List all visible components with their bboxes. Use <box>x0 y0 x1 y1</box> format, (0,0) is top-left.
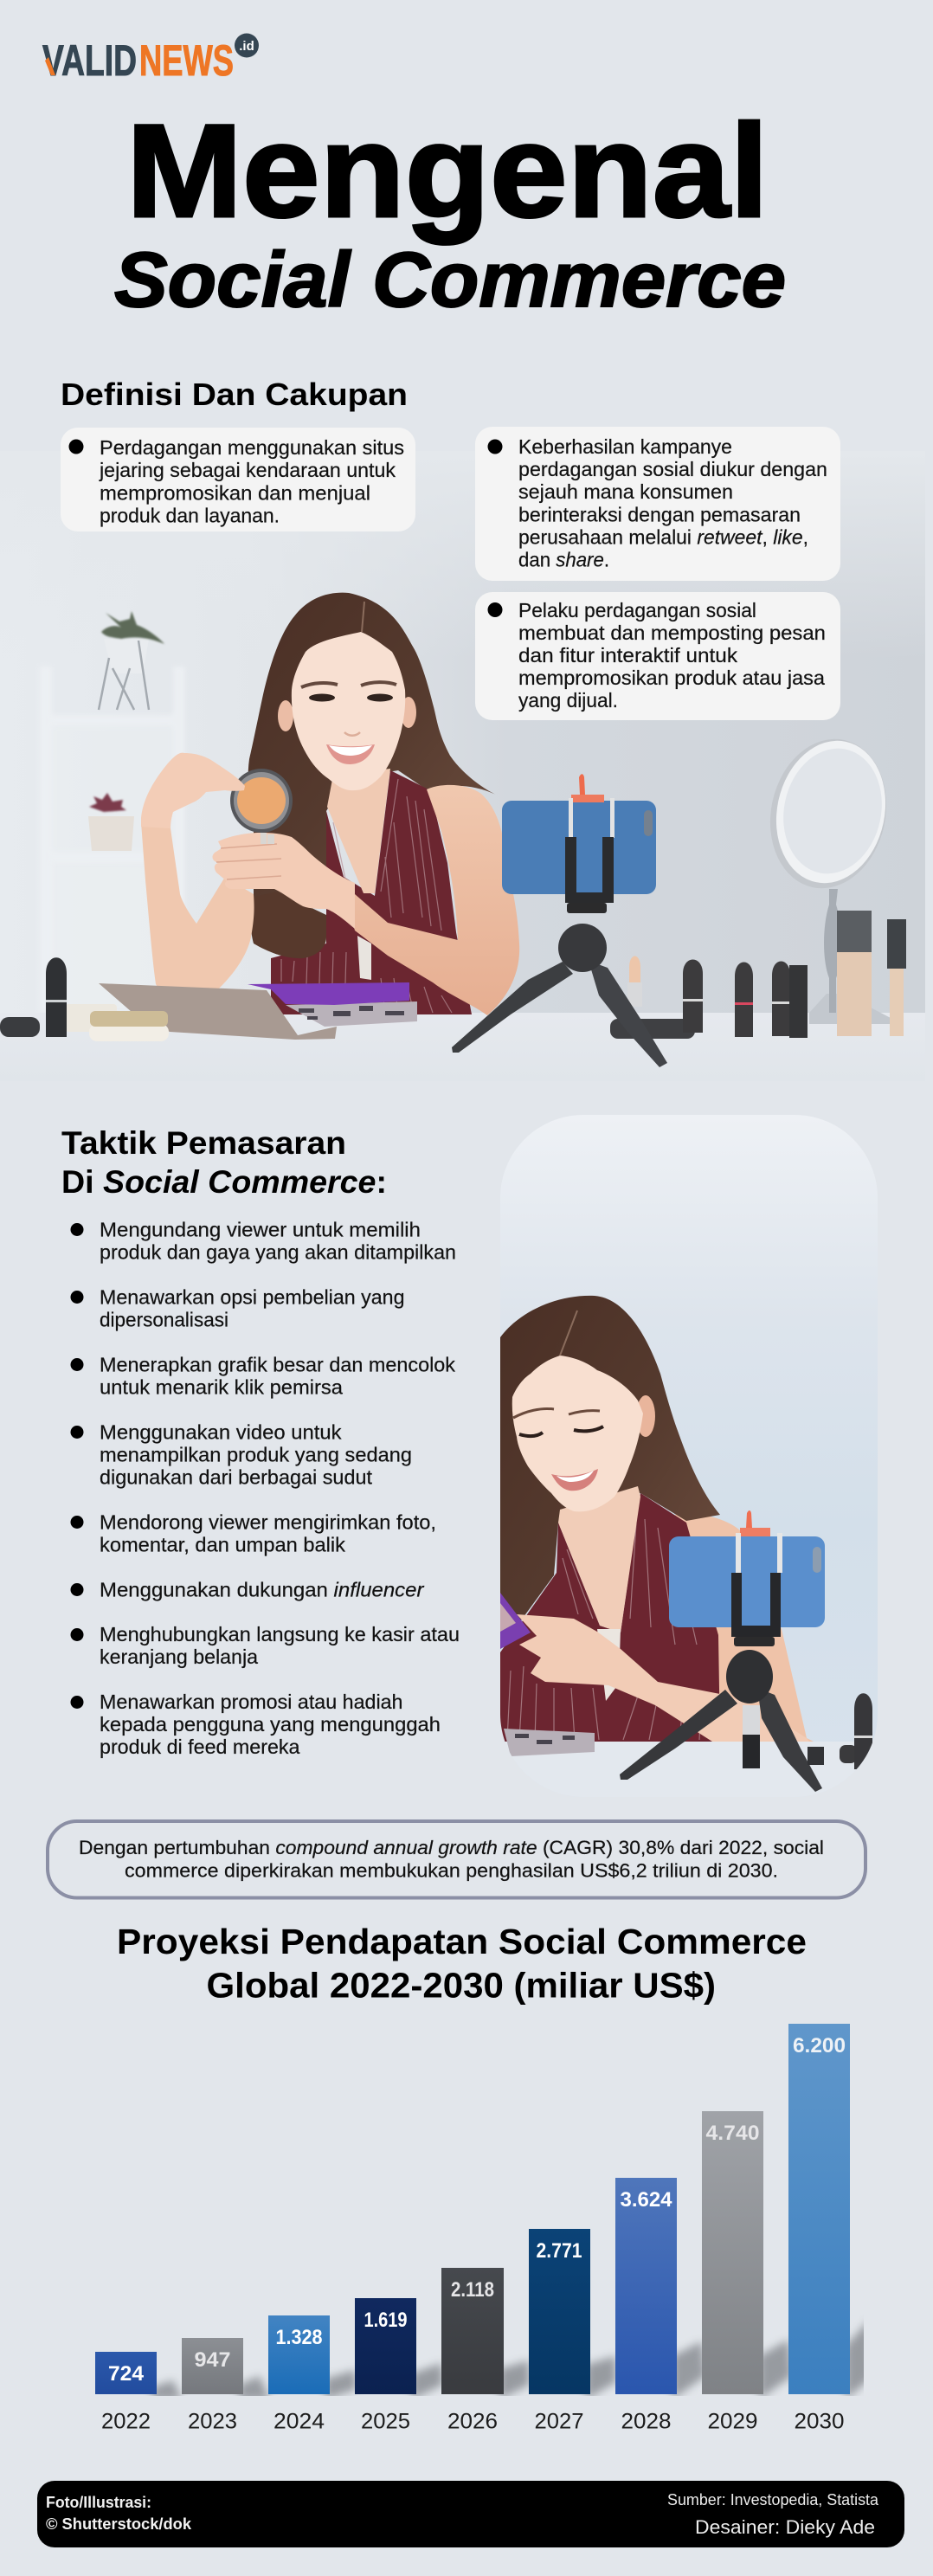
tactic 8: kepada pengguna yang mengunggah <box>100 1713 441 1736</box>
lying lipstick behind tripod <box>610 1019 695 1039</box>
tactic 4: digunakan dari berbagai sudut <box>100 1466 373 1489</box>
tripod ball <box>558 924 607 972</box>
card: definition 1 <box>61 428 415 531</box>
tactic 7: keranjang belanja <box>100 1645 258 1668</box>
tactic 2: Menawarkan opsi pembelian yang <box>100 1285 405 1308</box>
tactic 3: Menerapkan grafik besar dan mencolok <box>100 1353 455 1375</box>
tripod ball <box>726 1650 773 1703</box>
card text: perdagangan sosial diukur dengan <box>518 458 827 480</box>
chart title <box>117 1922 807 2005</box>
bar 2027: 2.771 <box>537 2239 582 2263</box>
tactic 2: dipersonalisasi <box>100 1309 228 1331</box>
finger lines <box>216 844 281 879</box>
clamp rods <box>736 1533 782 1573</box>
lips <box>326 744 375 764</box>
dress <box>500 1493 720 1742</box>
neck and chest <box>327 769 390 893</box>
dress stripes <box>281 779 452 1013</box>
hair back <box>248 593 496 900</box>
year axis labels: 2025 <box>361 2410 410 2434</box>
tripod right leg <box>589 961 667 1067</box>
card text: perusahaan melalui retweet, like, <box>518 526 808 549</box>
purple palette <box>248 982 409 1005</box>
lipstick 4 <box>772 961 790 1036</box>
tactic 1: produk dan gaya yang akan ditampilkan <box>100 1241 456 1264</box>
bullet <box>488 440 502 454</box>
logo wordmark NEWS: NEWS <box>139 36 234 85</box>
tactic 7 <box>71 1623 460 1668</box>
tactic 8: Menawarkan promosi atau hadiah <box>100 1690 403 1713</box>
hair part line <box>560 1311 577 1356</box>
year axis labels: 2027 <box>535 2410 583 2434</box>
lipstick 2 <box>683 959 703 1033</box>
small powder tin <box>65 1004 117 1032</box>
tactic 7: Menghubungkan langsung ke kasir atau <box>100 1623 460 1645</box>
year axis labels: 2030 <box>795 2410 845 2434</box>
leopard box <box>504 1729 595 1756</box>
card text <box>518 599 826 712</box>
chest <box>558 1486 640 1633</box>
clamp arms <box>731 1573 781 1637</box>
card text: produk dan layanan. <box>100 504 280 526</box>
nose <box>344 732 360 736</box>
card text: dan fitur interaktif untuk <box>518 644 738 667</box>
clamp knob <box>746 1510 752 1528</box>
tactic 8: produk di feed mereka <box>100 1736 300 1758</box>
clamp top <box>571 795 604 802</box>
clamp knob <box>579 774 585 795</box>
face <box>292 632 405 790</box>
year axis labels: 2026 <box>447 2410 498 2434</box>
callout text <box>79 1837 824 1882</box>
year axis labels: 2024 <box>273 2410 325 2434</box>
leopard box <box>286 1001 417 1027</box>
chart title: Proyeksi Pendapatan Social Commerce <box>117 1922 807 1961</box>
card background <box>475 427 840 581</box>
heading: taktik pemasaran <box>61 1125 387 1200</box>
bar 2024 <box>268 2315 330 2394</box>
photo backdrop <box>0 451 925 1081</box>
lipstick tall nude <box>627 956 642 1007</box>
mount <box>567 903 607 913</box>
card text: mempromosikan produk atau jasa <box>518 667 825 689</box>
mirror base <box>809 994 891 1024</box>
teeth <box>557 1471 594 1482</box>
bar 2026 <box>441 2268 504 2394</box>
mirror rim <box>763 731 898 893</box>
tactic 4: menampilkan produk yang sedang <box>100 1443 412 1465</box>
tactic 6: Menggunakan dukungan influencer <box>100 1578 425 1600</box>
clamp top <box>740 1528 770 1536</box>
title line 2: Social Commerce <box>114 237 786 324</box>
bar 2029: 4.740 <box>706 2122 760 2145</box>
card text: jejaring sebagai kendaraan untuk <box>99 459 396 481</box>
bar 2025 <box>355 2298 416 2394</box>
lipstick 3 <box>735 963 753 1037</box>
panel backdrop <box>500 1115 878 1797</box>
title line 1: Mengenal <box>126 97 769 245</box>
footer bar <box>37 2481 904 2547</box>
bar 2027 <box>529 2229 590 2394</box>
callout frame <box>48 1821 865 1897</box>
black tube <box>789 965 808 1038</box>
tactic 4 <box>71 1420 412 1489</box>
left arm <box>141 822 254 989</box>
inner white top <box>597 1629 621 1701</box>
year axis labels: 2023 <box>188 2410 237 2434</box>
card text: Pelaku perdagangan sosial <box>518 599 756 621</box>
bar 2028: 3.624 <box>620 2188 672 2212</box>
clamp rods <box>569 798 614 838</box>
card text <box>518 435 827 571</box>
tactic 3 <box>71 1353 455 1399</box>
bar chart: revenue projection <box>95 2024 874 2434</box>
eyes <box>519 1426 603 1436</box>
plant on shelf <box>99 611 164 710</box>
dress <box>271 770 472 1014</box>
bar 2022: 724 <box>108 2362 145 2386</box>
bar 2024: 1.328 <box>275 2326 322 2349</box>
bar 2025: 1.619 <box>364 2309 407 2332</box>
black box behind <box>808 1747 824 1765</box>
tactic 8 <box>71 1690 441 1758</box>
card background <box>475 592 840 720</box>
photo: beauty vlogger with phone on tripod <box>0 451 925 1081</box>
lying lipstick <box>840 1745 854 1763</box>
foundation bottle <box>837 911 872 1036</box>
purple palette <box>500 1593 531 1649</box>
upper arm and shoulder <box>675 1514 814 1742</box>
year axis labels: 2029 <box>708 2410 758 2434</box>
lower hand <box>212 833 355 929</box>
title <box>114 97 786 324</box>
card text: dan share. <box>518 549 609 571</box>
dress stripes <box>507 1519 701 1740</box>
eyebrows <box>513 1408 600 1418</box>
card text: berinteraksi dengan pemasaran <box>518 504 801 526</box>
tactic 1: Mengundang viewer untuk memilih <box>100 1219 421 1241</box>
standing lipstick left <box>46 957 67 1037</box>
logo badge text: .id <box>239 39 254 54</box>
tablet case <box>99 983 337 1040</box>
eyes <box>309 694 393 701</box>
source credit: Sumber: Investopedia, Statista <box>667 2491 879 2508</box>
card: definition 3 <box>475 592 840 720</box>
logo: Validnews.id <box>42 33 259 85</box>
bar 2026: 2.118 <box>451 2278 494 2302</box>
cushion compact <box>89 1011 169 1041</box>
logo accent <box>45 57 55 75</box>
compact base <box>229 853 271 880</box>
compact powder <box>230 769 293 833</box>
tripod left leg <box>452 962 573 1053</box>
year axis labels: 2022 <box>101 2410 151 2434</box>
chart title: Global 2022-2030 (miliar US$) <box>206 1965 716 2005</box>
tactic 2 <box>71 1285 405 1331</box>
lower hair lobe <box>250 892 326 958</box>
photo credit: © Shutterstock/dok <box>46 2515 192 2533</box>
hair part line <box>362 602 364 632</box>
bullet <box>488 602 502 617</box>
bar 2029 <box>702 2111 763 2394</box>
card text: sejauh mana konsumen <box>518 480 733 503</box>
logo wordmark VALID: VALID <box>42 36 137 85</box>
ear left <box>278 700 293 731</box>
mirror stem <box>824 889 841 1013</box>
bar shadows <box>152 2320 874 2399</box>
callout text: commerce diperkirakan membukukan penghasilan US$6,2 triliun di 2030. <box>125 1859 778 1882</box>
clamp arms <box>565 837 614 903</box>
mount <box>734 1637 775 1646</box>
bar 2028 <box>615 2178 677 2394</box>
mirror glass <box>772 739 893 883</box>
heading: taktik pemasaran: Taktik Pemasaran <box>61 1125 346 1161</box>
heading: definisi dan cakupan: Definisi Dan Cakupan <box>61 377 408 412</box>
white inner top <box>357 936 371 980</box>
ear <box>639 1395 655 1437</box>
table top <box>0 1013 925 1081</box>
tripod right leg <box>757 1688 822 1792</box>
upper hand <box>141 753 245 828</box>
card text: membuat dan memposting pesan <box>518 621 826 644</box>
photo credit <box>46 2494 192 2533</box>
photo: woman looking at palette, rounded panel <box>500 1115 878 1797</box>
list: marketing tactics <box>71 1219 460 1758</box>
card text: Perdagangan menggunakan situs <box>100 436 404 459</box>
callout: CAGR growth <box>48 1821 865 1897</box>
white shelf <box>40 667 185 1013</box>
card: definition 2 <box>475 427 840 581</box>
rings <box>261 833 274 844</box>
eyebrows <box>301 682 396 687</box>
bullet <box>69 440 83 454</box>
tactic 5: Mendorong viewer mengirimkan foto, <box>100 1510 436 1533</box>
footer background <box>37 2481 904 2547</box>
woman <box>141 593 519 1015</box>
bar 2023 <box>182 2338 243 2394</box>
bar 2023: 947 <box>194 2348 230 2372</box>
card text <box>99 436 404 526</box>
right arm and shoulder <box>342 785 519 1015</box>
phone <box>669 1536 825 1627</box>
tactic 5 <box>71 1510 436 1556</box>
right lipstick <box>854 1693 872 1769</box>
forearm and hand <box>517 1614 809 1742</box>
round mirror <box>756 728 900 1024</box>
card text: Keberhasilan kampanye <box>518 435 732 458</box>
table <box>500 1742 878 1797</box>
card background <box>61 428 415 531</box>
tactic 4: Menggunakan video untuk <box>100 1420 342 1443</box>
photo credit: Foto/Illustrasi: <box>46 2494 151 2511</box>
mirror frame <box>756 728 900 899</box>
backdrop fade <box>0 451 925 659</box>
hair back <box>500 1296 720 1649</box>
bar 2030: 6.200 <box>793 2034 846 2058</box>
potted plant <box>88 793 134 851</box>
lying lipstick left <box>0 1017 40 1037</box>
bar 2030 <box>788 2024 850 2394</box>
ear right <box>401 697 416 728</box>
tactic 5: komentar, dan umpan balik <box>100 1534 346 1556</box>
front lipstick <box>743 1705 760 1768</box>
heading: taktik pemasaran: Di Social Commerce: <box>61 1164 387 1200</box>
tactic 3: untuk menarik klik pemirsa <box>100 1376 343 1399</box>
bar 2022 <box>95 2352 157 2394</box>
designer credit: Desainer: Dieky Ade <box>695 2516 875 2538</box>
callout text: Dengan pertumbuhan compound annual growth rate (CAGR) 30,8% dari 2022, social <box>79 1837 824 1858</box>
year axis labels <box>101 2410 845 2434</box>
year axis labels: 2028 <box>621 2410 672 2434</box>
teeth <box>329 745 372 756</box>
phone camera <box>813 1547 821 1573</box>
tactic 1 <box>71 1219 456 1264</box>
card text: yang dijual. <box>518 689 618 712</box>
phone camera <box>644 810 653 836</box>
concealer tube <box>887 919 906 1036</box>
tripod with phone <box>452 774 695 1067</box>
face <box>512 1356 643 1511</box>
logo badge circle <box>235 33 259 57</box>
card text: mempromosikan dan menjual <box>100 481 370 504</box>
phone <box>502 801 656 894</box>
lips <box>551 1469 598 1491</box>
tripod left leg <box>620 1690 737 1780</box>
